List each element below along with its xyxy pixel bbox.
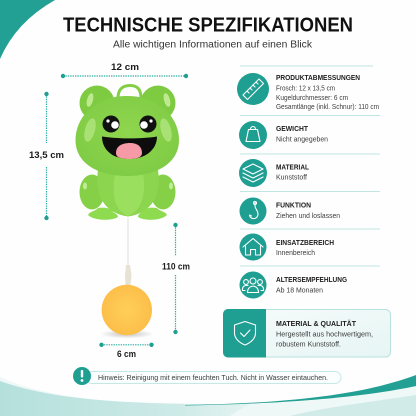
dimension: string 110 cm [162,223,190,334]
spec: area of use: EINSATZBEREICH [276,238,334,247]
spec: area of use: Innenbereich [276,248,315,257]
spec: material: Kunststoff [276,172,307,182]
tongue [116,143,142,159]
eyes [102,116,120,132]
callout: material and quality [223,309,390,358]
yellow ball [102,285,152,335]
spec: product dimensions: PRODUKTABMESSUNGEN [276,73,360,82]
spec: function: FUNKTION [276,200,311,210]
body [97,170,159,216]
note: cleaning hint [73,367,341,385]
ears [80,86,114,120]
dimension: ball 6 cm: 6 cm [117,349,136,359]
icon: ruler [237,73,269,105]
spec: weight: GEWICHT [276,124,308,133]
spec: function: Ziehen und loslassen [276,211,340,220]
callout: material and quality: Hergestellt aus hochwertigem, [276,330,373,338]
spec: material: MATERIAL [276,162,309,172]
icon: people [240,272,266,298]
top-left corner swoosh [0,0,55,59]
subtitle: Alle wichtigen Informationen auf einen Blick [113,40,312,50]
spec: product dimensions [237,73,379,111]
dimension: height 13,5 cm: 13,5 cm [29,150,64,160]
spec: age recommendation [240,272,347,298]
icon: house [240,234,266,260]
icon: exclamation mark [73,367,91,385]
spec: product dimensions: Gesamtlänge (inkl. Schnur): 110 cm [276,102,379,111]
legs [80,174,104,210]
string [127,218,129,266]
dimension: string 110 cm: 110 cm [162,262,190,272]
icon: layers [239,159,267,187]
dimension: width 12 cm [61,62,188,78]
mouth [102,136,157,159]
icon: weight [239,121,267,149]
spec: product dimensions: Kugeldurchmesser: 6 cm [276,93,348,102]
hanging loop [118,86,141,98]
callout: material and quality: MATERIAL & QUALITÄT [276,319,356,328]
title: TECHNISCHE SPEZIFIKATIONEN [63,14,353,36]
knot [125,265,132,285]
spec: weight [239,121,328,149]
spec: function [240,198,340,224]
callout: material and quality: robustem Kunststoff. [276,340,341,348]
spec: weight: Nicht angegeben [276,134,328,144]
head [76,96,179,176]
note: cleaning hint: Hinweis: Reinigung mit einem feuchten Tuch. Nicht in Wasser eintauchen. [98,373,328,382]
dimension: height 13,5 cm [29,92,64,220]
icon: shield check [234,322,256,345]
dimension: width 12 cm: 12 cm [111,62,139,72]
dimension: ball 6 cm [99,343,154,359]
feet [88,208,167,220]
spec: product dimensions: Frosch: 12 x 13,5 cm [276,84,335,92]
spec: age recommendation: ALTERSEMPFEHLUNG [276,275,347,284]
spec: age recommendation: Ab 18 Monaten [276,286,323,294]
icon: hook [240,198,266,224]
ball shadow [100,330,154,338]
bottom wave decoration [0,375,416,416]
spec: area of use [240,234,334,260]
spec: material [239,159,309,187]
frog toy [76,86,179,220]
spec dividers [240,66,380,266]
